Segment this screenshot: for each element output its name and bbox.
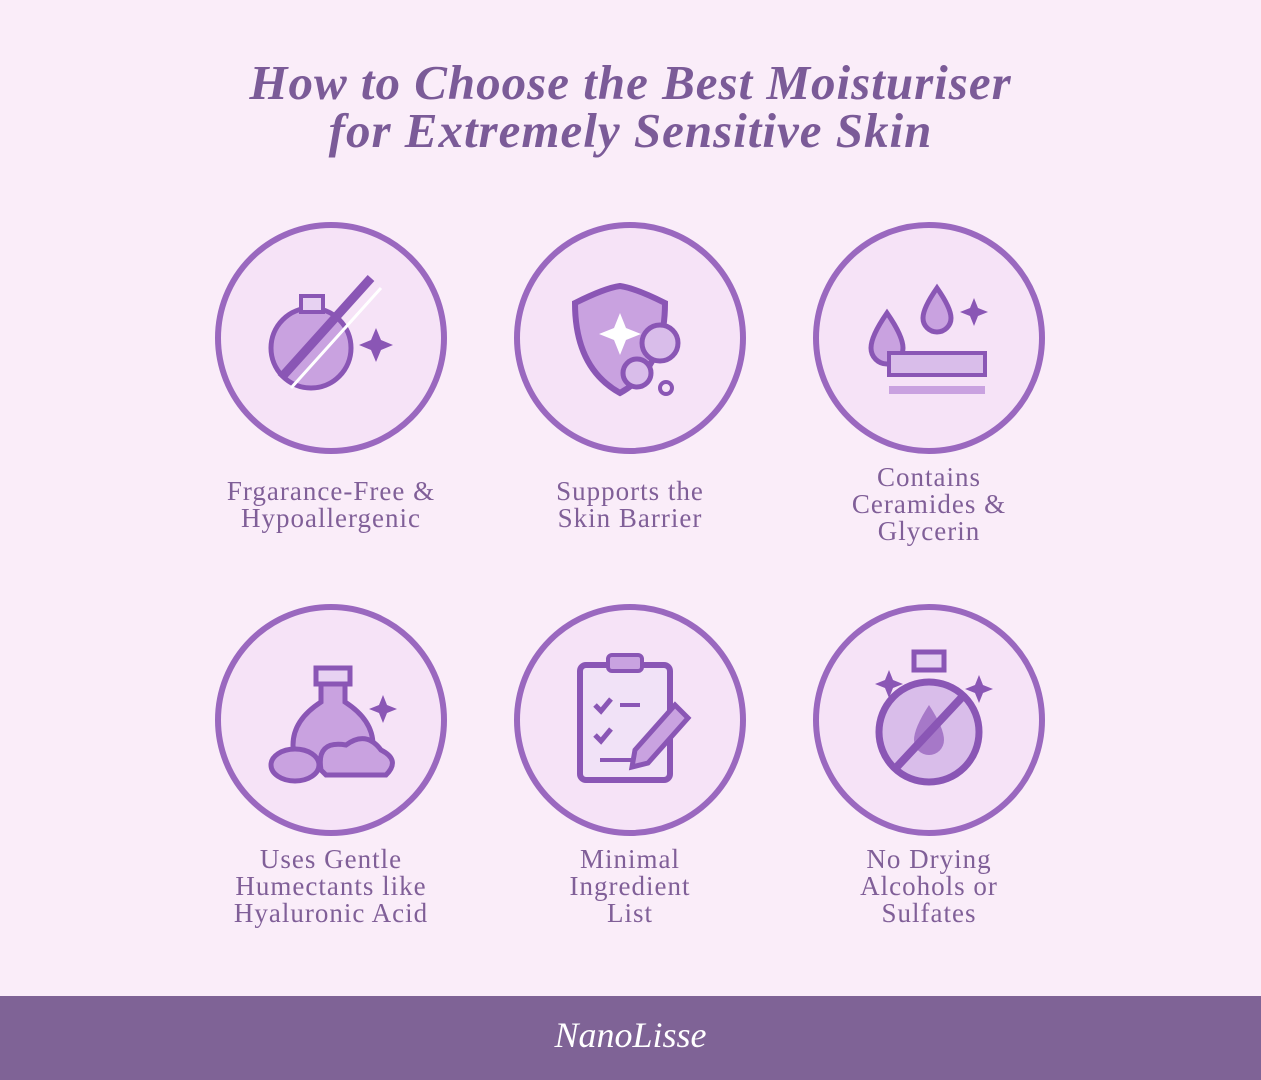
icon: crossed bottle xyxy=(813,604,1045,836)
logo: NanoLisse xyxy=(554,1015,707,1055)
footer xyxy=(0,996,1261,1080)
title: How to Choose the Best Moisturiser xyxy=(249,55,1012,110)
title: for Extremely Sensitive Skin xyxy=(329,103,932,158)
panel: humectants xyxy=(215,604,447,928)
label xyxy=(570,844,690,928)
label xyxy=(556,476,704,533)
label: Contains xyxy=(877,462,981,492)
icon: shield xyxy=(514,222,746,454)
label: Supports the xyxy=(556,476,704,506)
icon: drops and skin layer xyxy=(813,222,1045,454)
panel: no drying alcohols xyxy=(813,604,1045,928)
label: Hypoallergenic xyxy=(241,503,421,533)
label: Sulfates xyxy=(882,898,976,928)
label: Frgarance-Free & xyxy=(227,476,435,506)
label xyxy=(852,462,1006,546)
label: Minimal xyxy=(580,844,680,874)
label xyxy=(234,844,428,928)
label: List xyxy=(607,898,653,928)
label: Glycerin xyxy=(878,516,980,546)
panel: skin barrier xyxy=(514,222,746,533)
label xyxy=(860,844,998,928)
icon: crossed perfume xyxy=(215,222,447,454)
label xyxy=(227,476,435,533)
label: Ceramides & xyxy=(852,489,1006,519)
label: Uses Gentle xyxy=(260,844,402,874)
label: Skin Barrier xyxy=(558,503,702,533)
panel: fragrance-free xyxy=(215,222,447,533)
label: Alcohols or xyxy=(860,871,998,901)
label: Ingredient xyxy=(570,871,690,901)
panel: minimal ingredients xyxy=(514,604,746,928)
panel: ceramides xyxy=(813,222,1045,546)
label: Hyaluronic Acid xyxy=(234,898,428,928)
icon: flask xyxy=(215,604,447,836)
title xyxy=(249,55,1012,158)
icon: clipboard xyxy=(514,604,746,836)
label: No Drying xyxy=(866,844,992,874)
label: Humectants like xyxy=(235,871,427,901)
